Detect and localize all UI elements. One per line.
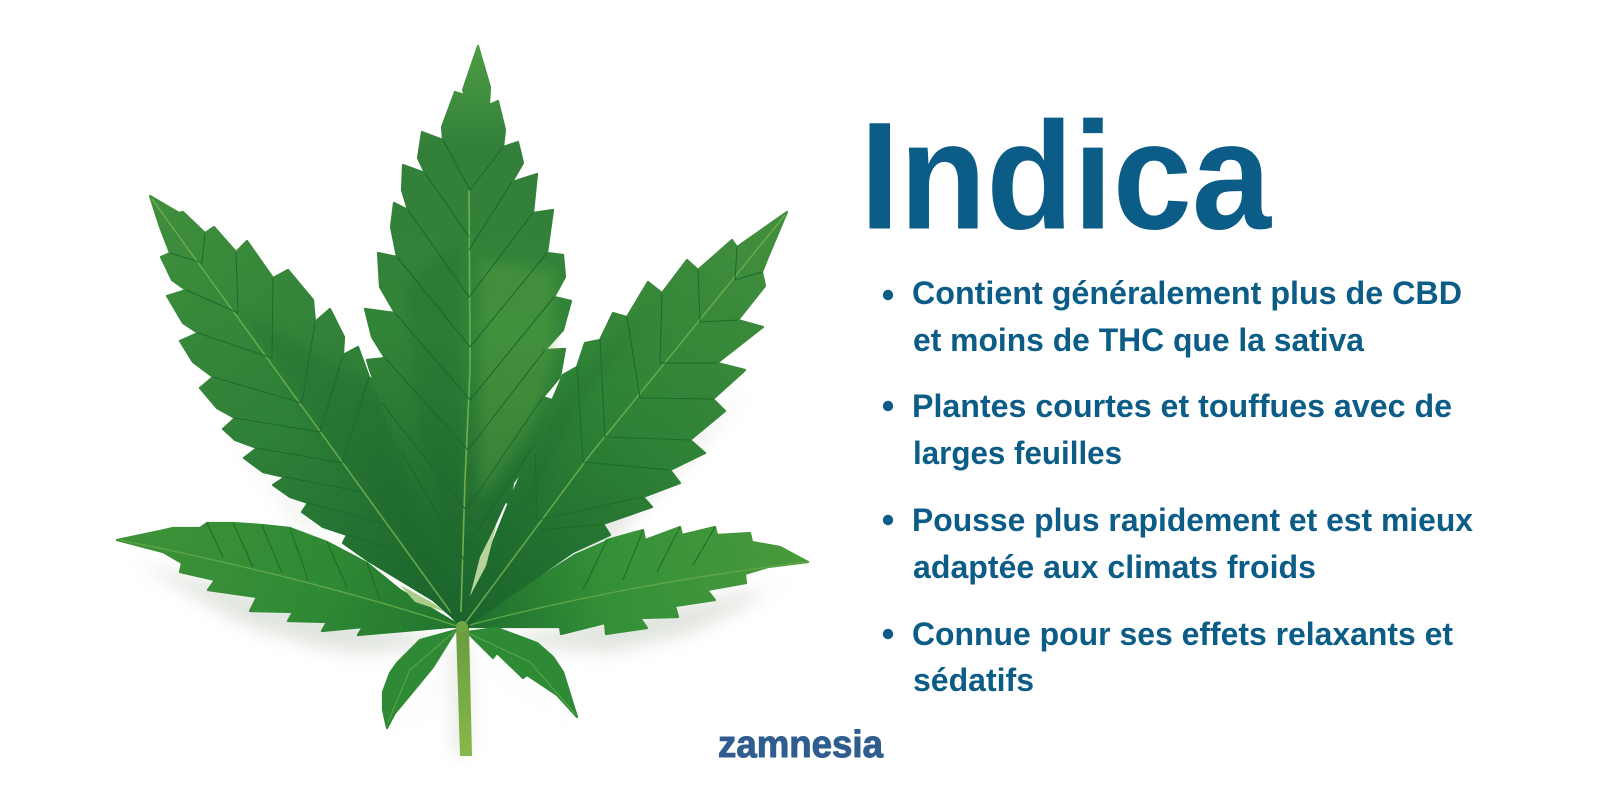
shading: darker left half of center leaflet (405, 240, 460, 560)
bullet 4 (883, 616, 1453, 698)
shading: inner side of upper-right leaflet (490, 300, 660, 590)
bullet 3 (883, 502, 1473, 585)
logo: zamnesia: zamnesia (718, 724, 884, 766)
leaflet: upper left (150, 196, 462, 627)
shading: lighter right half of center leaflet (480, 260, 555, 500)
leaf shadow (136, 390, 796, 753)
bullet 1: et moins de THC que la sativa (913, 322, 1364, 358)
leaflet: small bottom left (383, 630, 456, 728)
leaflet: lower right (462, 527, 808, 634)
shading: inner side of upper-left leaflet (240, 310, 440, 590)
bullet 2: larges feuilles (913, 435, 1122, 471)
bullet 1 (883, 275, 1462, 358)
bullet list (883, 275, 1473, 698)
illustration: cannabis leaf (117, 46, 808, 756)
gap between center and right leaflets (470, 523, 497, 596)
bullet 2 (883, 388, 1452, 471)
stem (456, 628, 472, 756)
bullet 4: sédatifs (913, 662, 1034, 698)
leaflet: lower left (117, 523, 462, 635)
title: Indica (860, 90, 1273, 262)
leaf junction (456, 621, 468, 633)
bullet 4: Connue pour ses effets relaxants et (912, 616, 1453, 652)
bullet 3: Pousse plus rapidement et est mieux (912, 502, 1473, 538)
bullet 3: adaptée aux climats froids (913, 549, 1316, 585)
gap between lower-left and upper-left leaflets (400, 585, 445, 612)
leaflet: center (365, 46, 571, 627)
bullet 2: Plantes courtes et touffues avec de (912, 388, 1452, 424)
leaflet: upper right (462, 212, 787, 625)
leaflet: small bottom right (467, 628, 577, 717)
bullet 1: Contient généralement plus de CBD (912, 275, 1462, 311)
